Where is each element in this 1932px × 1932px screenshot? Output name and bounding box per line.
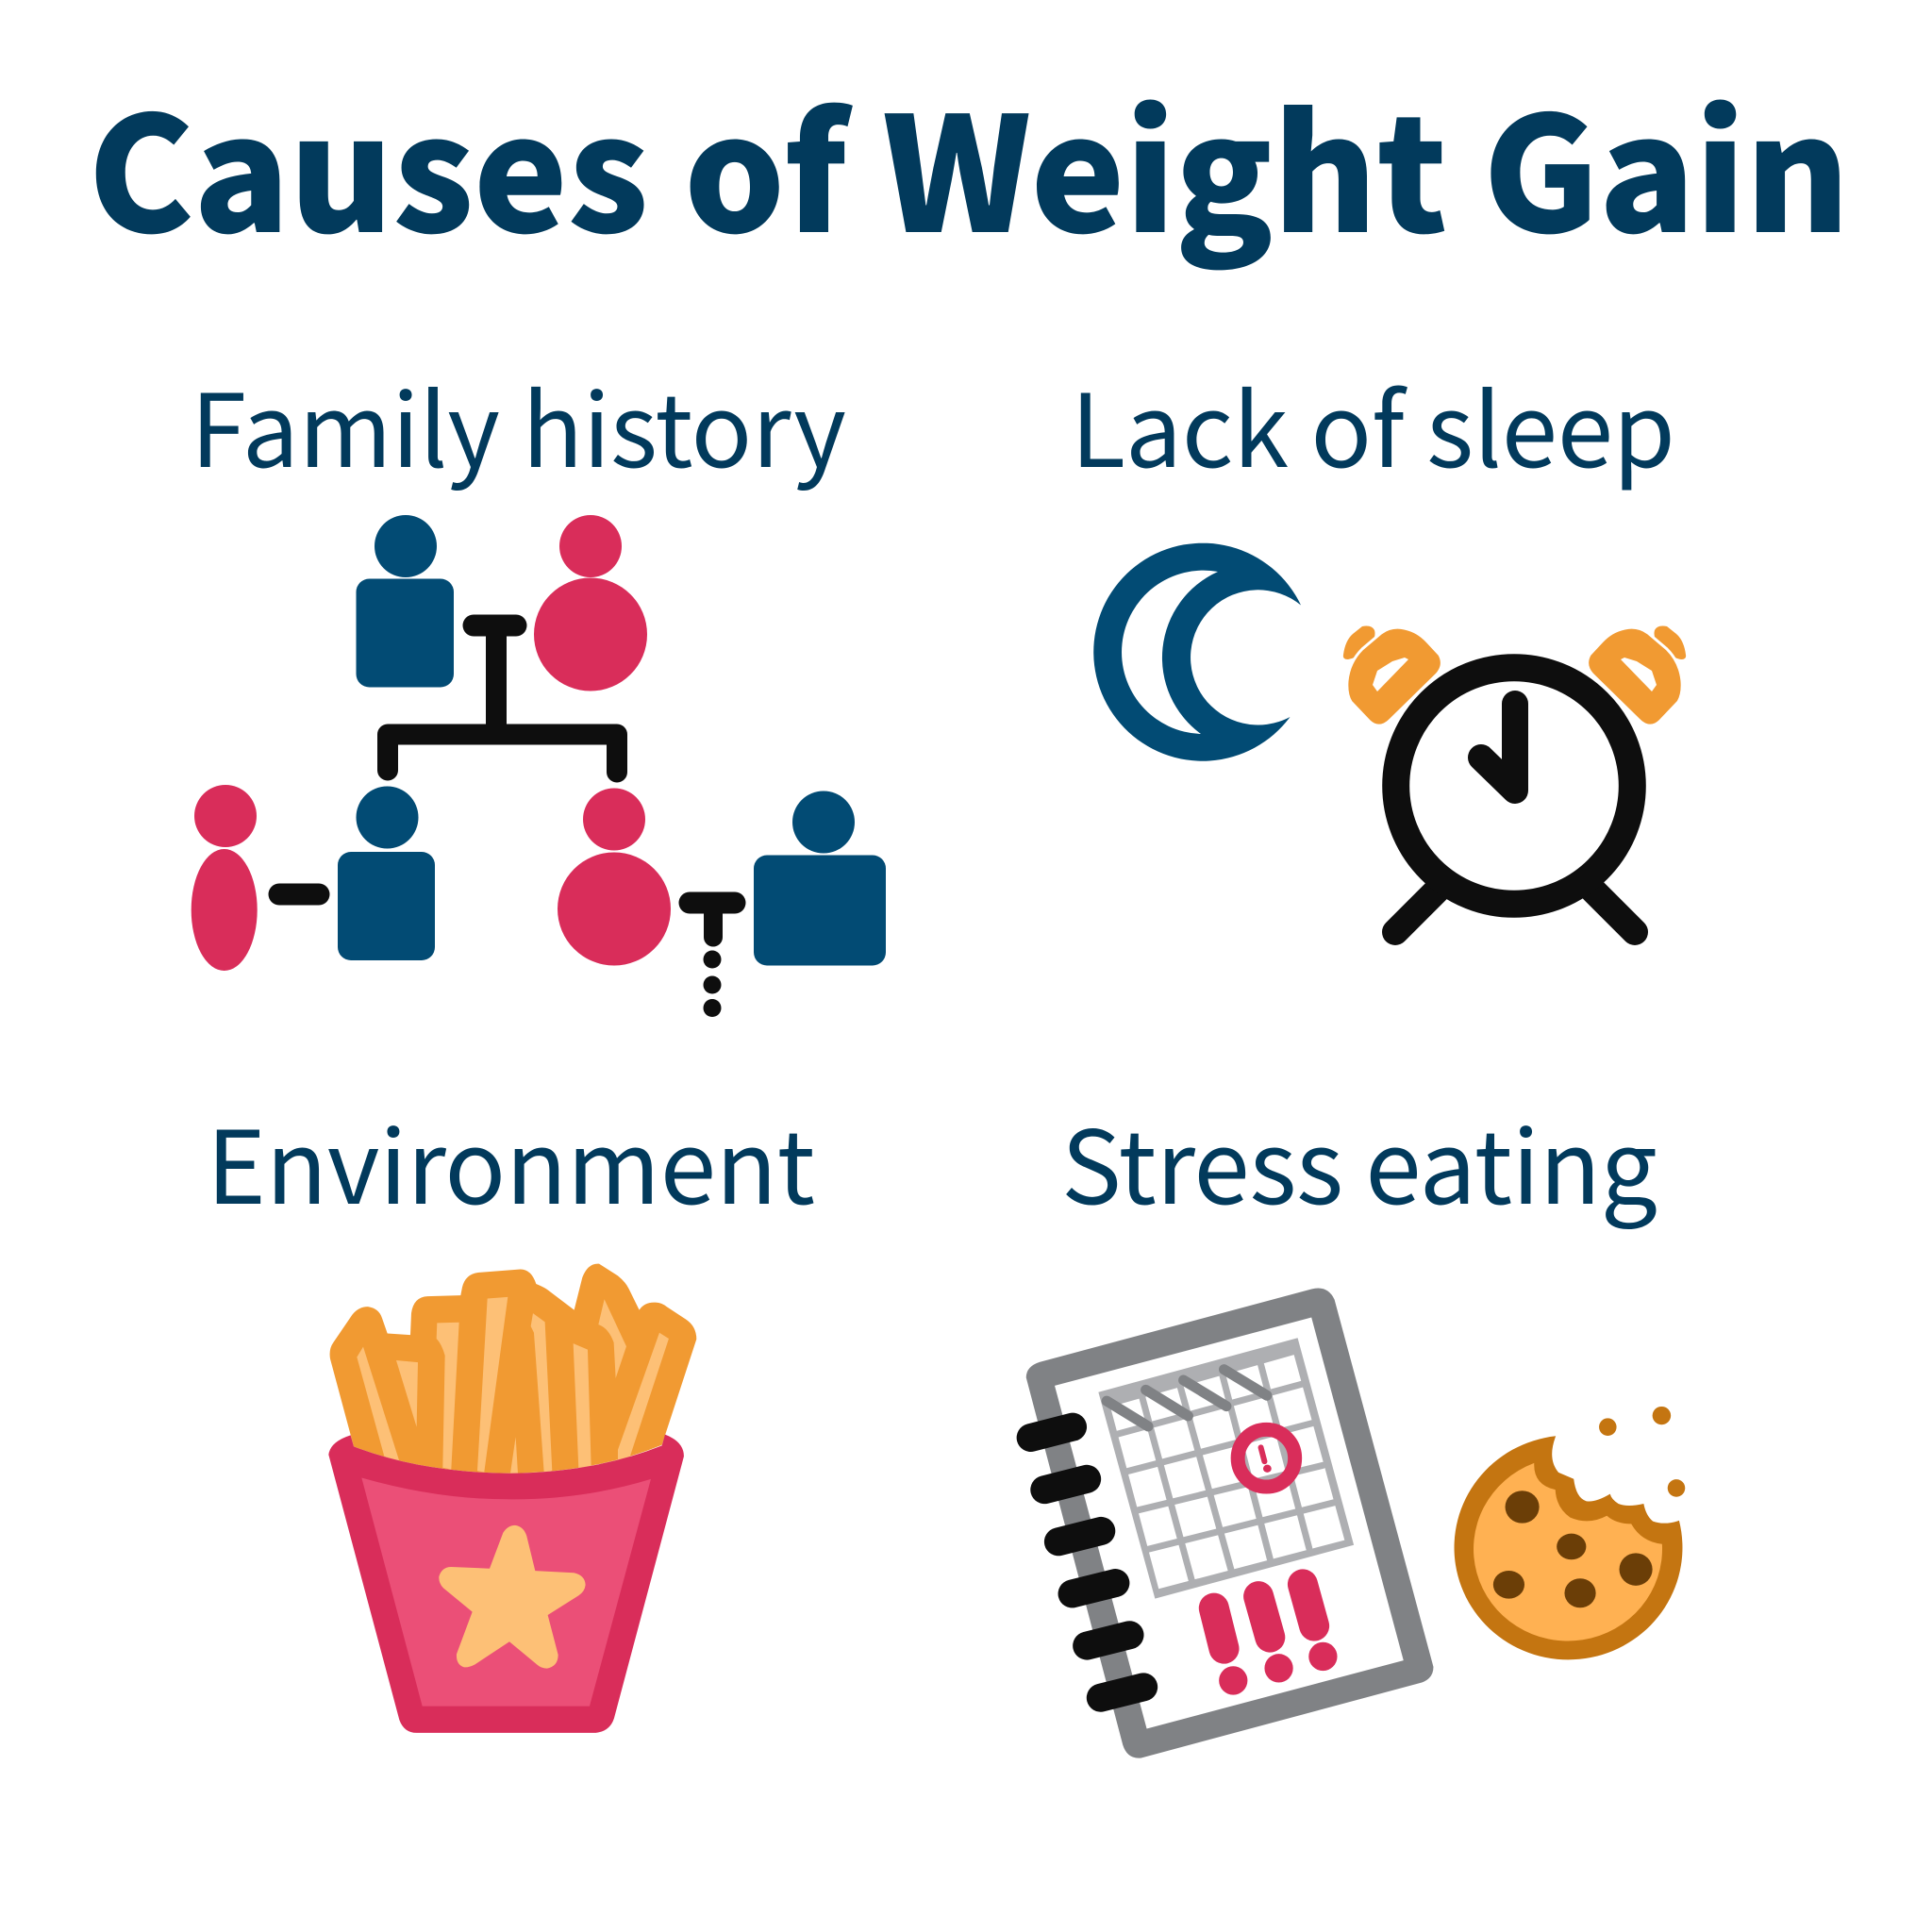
clock feet	[1395, 891, 1635, 932]
fry highlights	[357, 1297, 669, 1474]
clock hands	[1481, 704, 1515, 791]
heading: stress eating: Stress eating	[1061, 1087, 1657, 1233]
mother	[558, 789, 671, 966]
grandfather	[357, 515, 454, 687]
icon: family tree	[192, 515, 886, 1017]
heading: lack of sleep: Lack of sleep	[1071, 350, 1675, 496]
left bell	[1343, 626, 1441, 725]
crumbs	[1599, 1407, 1685, 1497]
calendar	[1098, 1338, 1354, 1599]
binder rings	[1031, 1427, 1143, 1698]
icon: bitten cookie	[1455, 1407, 1685, 1659]
clock face	[1396, 668, 1632, 904]
carton panel	[361, 1478, 651, 1707]
uncle	[338, 787, 435, 960]
icon: crescent moon	[1093, 543, 1301, 761]
aunt	[192, 785, 258, 971]
chocolate chips	[1493, 1491, 1653, 1607]
cookie crust	[1455, 1436, 1682, 1659]
circled date	[1238, 1429, 1295, 1487]
heading: environment: Environment	[207, 1087, 815, 1233]
binding marks	[1107, 1370, 1267, 1426]
father	[754, 791, 886, 966]
descendant dots	[704, 951, 721, 1017]
notebook cover	[1026, 1289, 1433, 1758]
icon: alarm clock	[1343, 626, 1686, 932]
carton	[328, 1435, 684, 1733]
star	[439, 1525, 586, 1669]
heading: family history: Family history	[191, 350, 846, 496]
right bell	[1588, 626, 1686, 725]
grandmother	[534, 515, 647, 691]
exclamation marks	[1214, 1584, 1338, 1695]
icon: planner notebook	[1026, 1289, 1433, 1758]
notebook page	[1055, 1318, 1404, 1728]
icon: french fries	[328, 1264, 696, 1733]
fries	[330, 1264, 696, 1474]
connector lines	[279, 625, 735, 938]
cookie centre	[1474, 1463, 1662, 1641]
title: Causes of Weight Gain	[88, 47, 1850, 278]
